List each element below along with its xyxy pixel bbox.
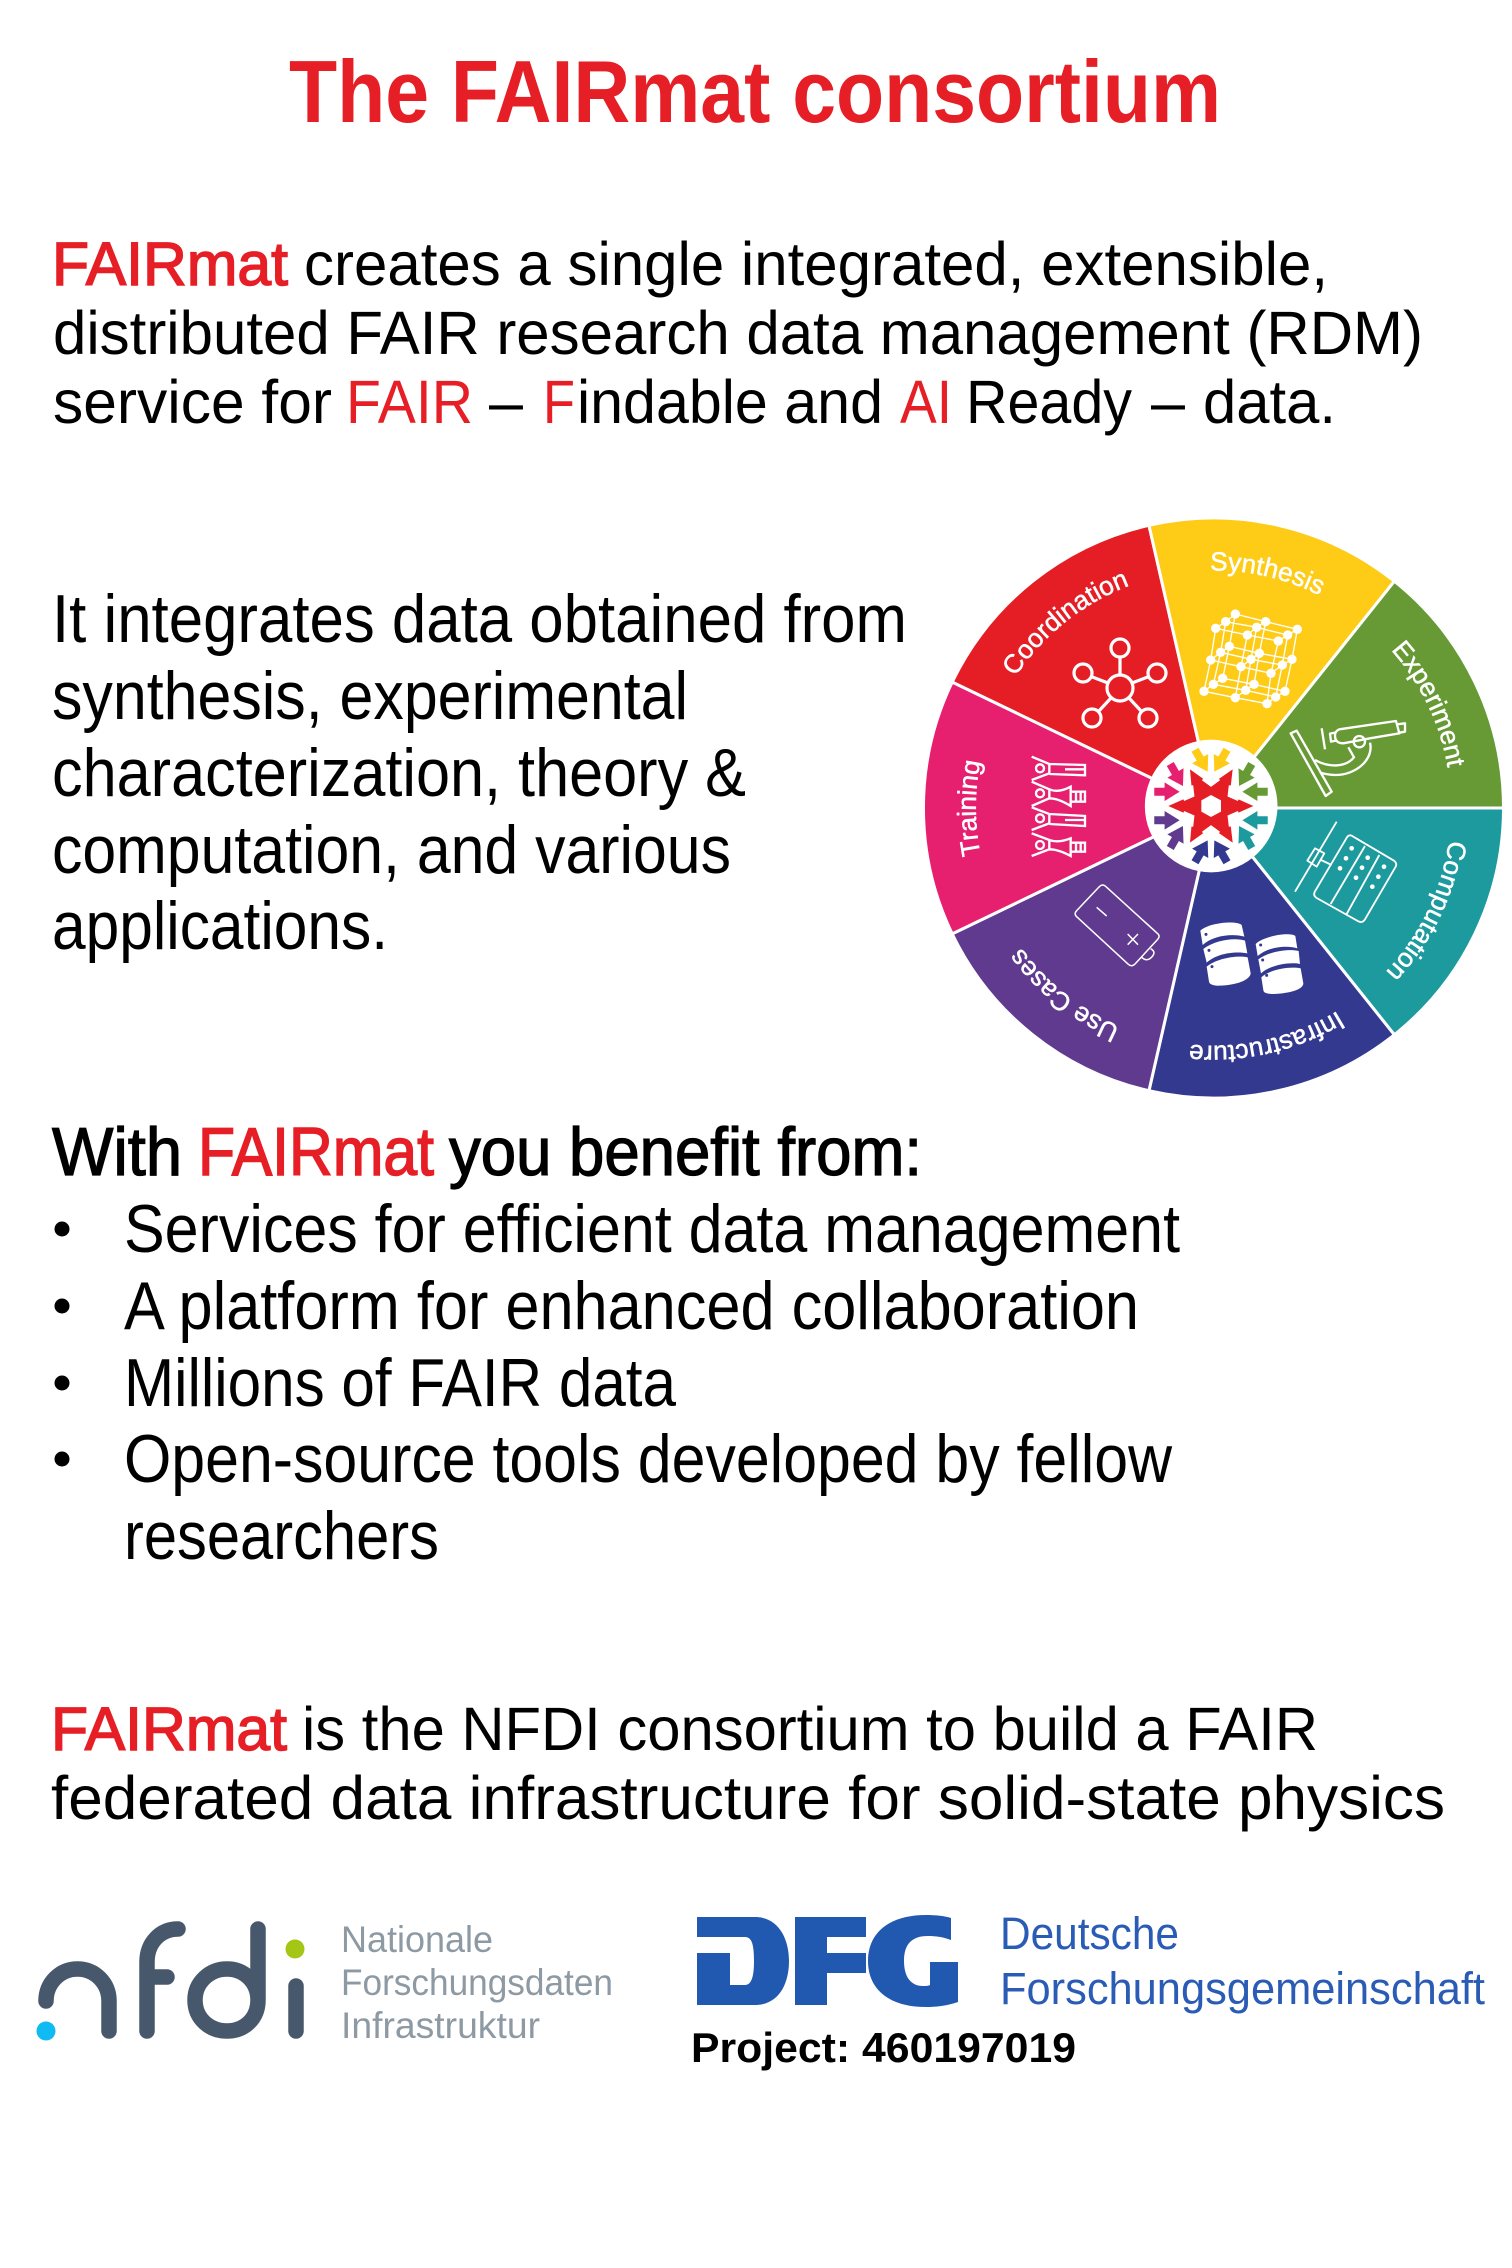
nfdi wordmark: Infrastruktur bbox=[341, 2005, 540, 2046]
sector: Use Cases bbox=[952, 808, 1214, 1091]
text block: FAIRmat introduction bbox=[52, 230, 1423, 437]
label: Training: Training bbox=[956, 760, 985, 858]
benefits heading: FAIRmat bbox=[198, 1114, 434, 1190]
icon: microscope bbox=[1291, 721, 1405, 796]
icon: server rack bbox=[1295, 822, 1396, 922]
nfdi wordmark: Forschungsdaten bbox=[341, 1962, 613, 2003]
bullet 3: Millions of FAIR data bbox=[124, 1345, 676, 1421]
text block: FAIRmat introduction: FAIR bbox=[346, 368, 473, 437]
logo: nfdi bbox=[36, 1919, 613, 2046]
text block: FAIRmat introduction: – bbox=[489, 368, 524, 437]
icon: databases bbox=[1200, 922, 1303, 994]
DFG wordmark: Deutsche bbox=[1000, 1908, 1179, 1959]
text block: FAIRmat introduction: FAIRmat bbox=[52, 230, 288, 299]
text block: FAIRmat introduction: – bbox=[1151, 368, 1186, 437]
nfdi wordmark: Nationale bbox=[341, 1919, 493, 1960]
text block: NFDI statement bbox=[51, 1695, 1445, 1833]
text block: FAIRmat introduction: data. bbox=[1203, 368, 1336, 437]
text block: data integration: synthesis, experimental bbox=[52, 658, 688, 734]
hub: snowflake logo bbox=[1145, 740, 1277, 872]
benefits heading: you benefit from: bbox=[449, 1114, 922, 1190]
text block: FAIRmat introduction: service for bbox=[53, 368, 332, 437]
bullet 1: Services for efficient data management bbox=[124, 1191, 1180, 1267]
benefits list bbox=[52, 1114, 1180, 1574]
sector: Coordination bbox=[952, 525, 1214, 808]
sector: Experiment bbox=[1214, 581, 1504, 808]
bullet 4 bbox=[54, 1421, 1173, 1574]
sector: Training bbox=[923, 682, 1214, 934]
text block: NFDI statement: federated data infrastructure for solid-state physics bbox=[51, 1764, 1445, 1833]
nfdi mark bbox=[46, 1929, 296, 2031]
text block: FAIRmat introduction: indable and bbox=[577, 368, 883, 437]
title: The FAIRmat consortium bbox=[289, 42, 1221, 141]
text block: data integration: It integrates data obtained from bbox=[52, 581, 907, 657]
benefits heading: With bbox=[52, 1114, 182, 1190]
DFG wordmark bbox=[1000, 1908, 1485, 2014]
text block: data integration bbox=[52, 581, 907, 964]
icon: battery bbox=[1075, 885, 1159, 966]
label: Coordination: Coordination bbox=[1004, 574, 1128, 673]
bullet 4: Open-source tools developed by fellow bbox=[124, 1421, 1173, 1497]
label: Computation: Computation bbox=[1386, 842, 1466, 979]
label: Experiment: Experiment bbox=[1392, 640, 1464, 768]
text block: FAIRmat introduction: creates a single integrated, extensible, bbox=[304, 230, 1328, 299]
sector: Synthesis bbox=[1149, 518, 1394, 808]
icon: test tubes bbox=[1032, 757, 1085, 856]
text block: FAIRmat introduction: distributed FAIR research data management (RDM) bbox=[53, 299, 1423, 368]
nfdi wordmark bbox=[341, 1919, 613, 2046]
icon: network bbox=[1074, 639, 1166, 727]
text block: NFDI statement: is the NFDI consortium to build a FAIR bbox=[302, 1695, 1318, 1764]
label: Synthesis: Synthesis bbox=[1211, 552, 1324, 594]
text block: data integration: computation, and various bbox=[52, 812, 731, 888]
text block: data integration: applications. bbox=[52, 888, 388, 964]
DFG mark bbox=[697, 1915, 958, 2007]
text block: FAIRmat introduction: Ready bbox=[966, 368, 1132, 437]
text block: FAIRmat introduction: AI bbox=[900, 368, 952, 437]
project number: Project: 460197019 bbox=[691, 2024, 1076, 2071]
sector: Computation bbox=[1214, 808, 1504, 1035]
bullet 4: researchers bbox=[124, 1498, 439, 1574]
bullet 2: A platform for enhanced collaboration bbox=[124, 1268, 1139, 1344]
DFG wordmark: Forschungsgemeinschaft bbox=[1000, 1963, 1485, 2014]
label: Infrastructure: Infrastructure bbox=[1190, 1012, 1345, 1062]
text block: NFDI statement: FAIRmat bbox=[51, 1695, 287, 1764]
text block: FAIRmat introduction: F bbox=[543, 368, 575, 437]
wheel sectors and labels bbox=[924, 519, 1502, 1097]
red star bbox=[1168, 769, 1253, 843]
logo: DFG bbox=[697, 1908, 1485, 2014]
sector: Infrastructure bbox=[1149, 808, 1394, 1098]
text block: data integration: characterization, theory & bbox=[52, 735, 746, 811]
icon: crystal lattice bbox=[1199, 609, 1302, 708]
label: Use Cases: Use Cases bbox=[1012, 950, 1116, 1042]
wheel diagram bbox=[924, 519, 1502, 1097]
benefits heading bbox=[52, 1114, 922, 1190]
